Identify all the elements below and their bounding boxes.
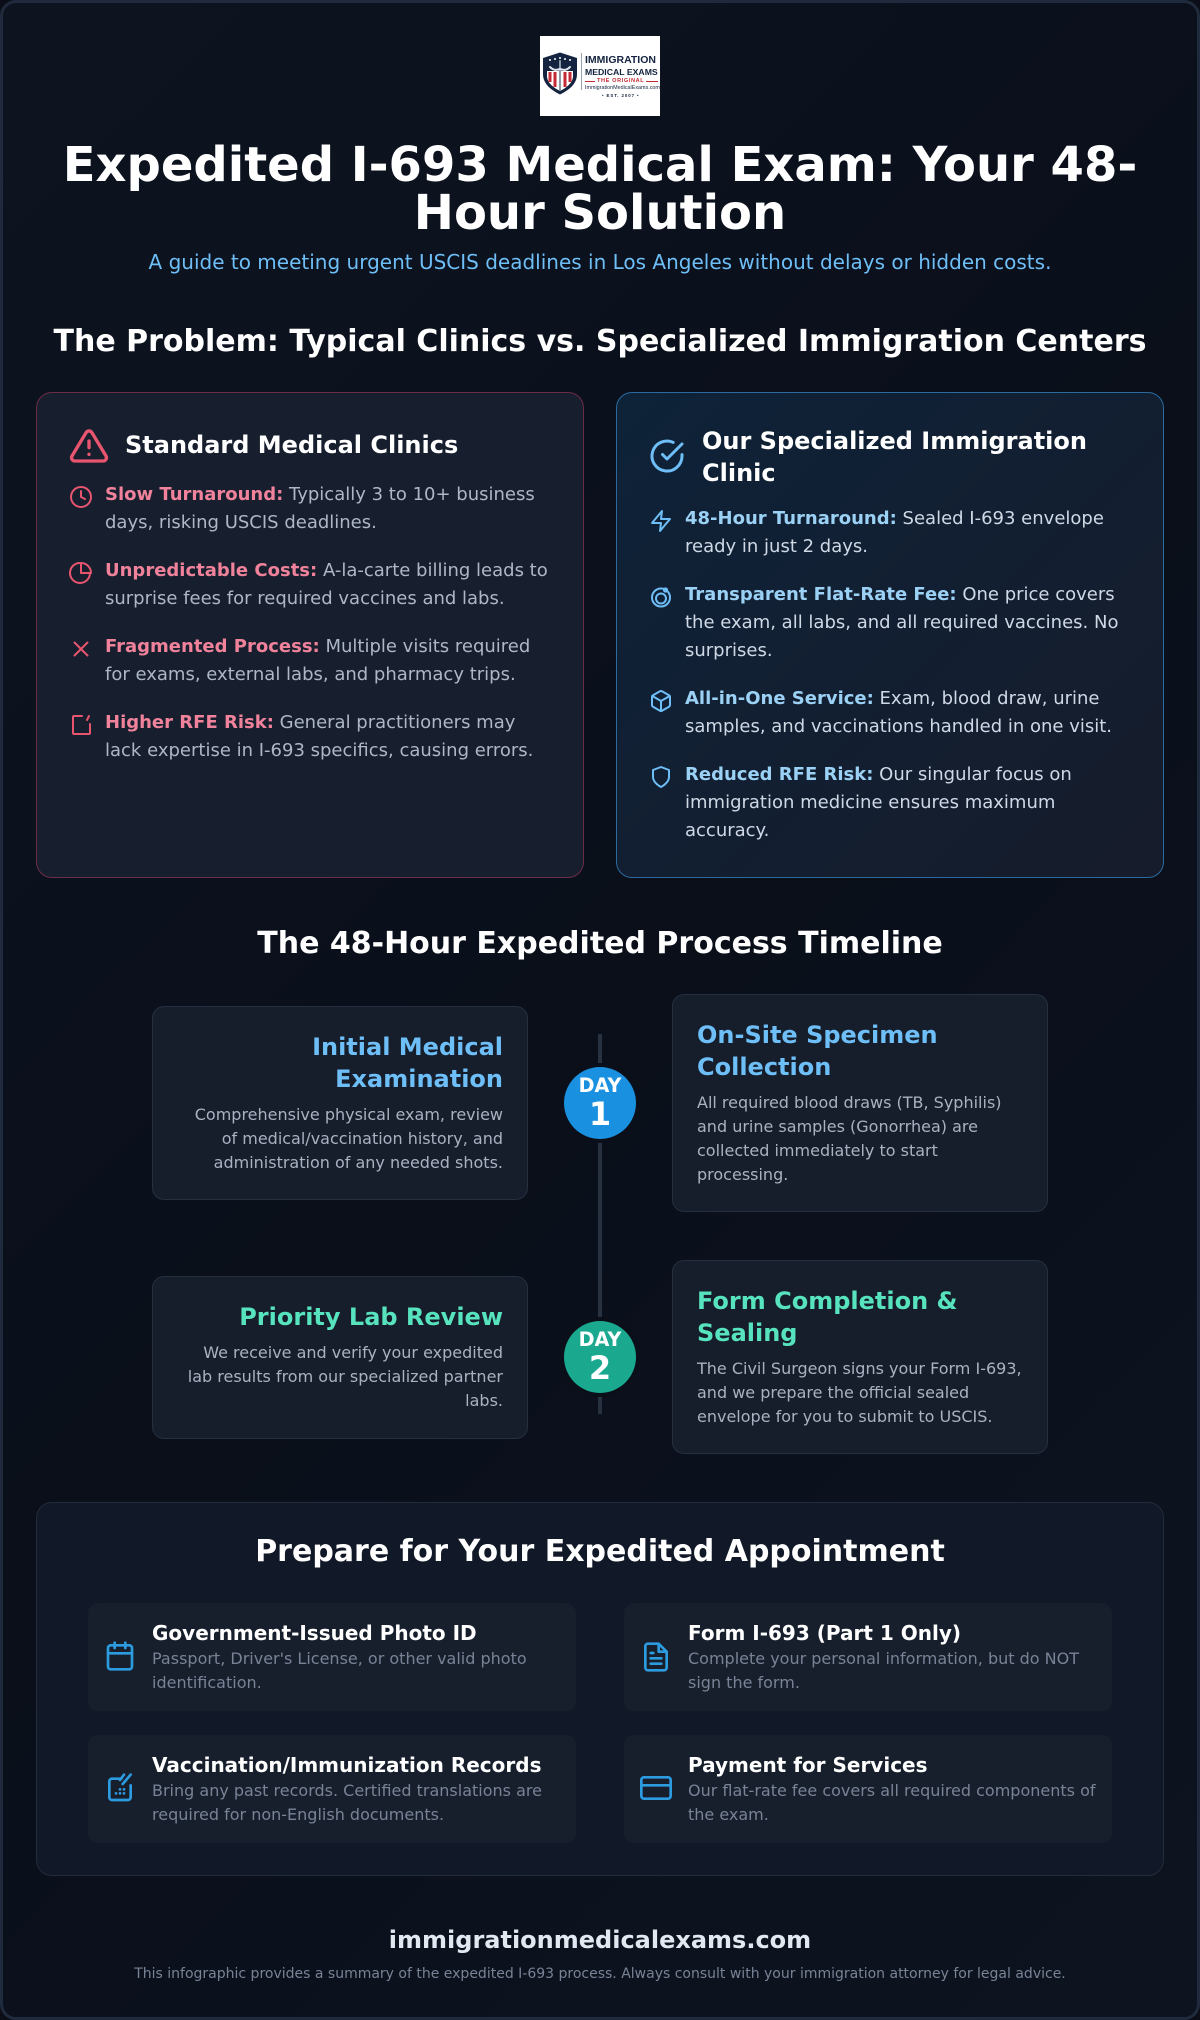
marker: day 2: 2 [589, 1349, 611, 1387]
item text: identification. [152, 1673, 262, 1692]
item text: Higher RFE Risk: General practitioners may [105, 712, 515, 733]
item: 48-hour turnaround [651, 508, 1104, 557]
panel: prepare for appointment [36, 1502, 1164, 1876]
logo text: IMMIGRATION [585, 54, 656, 66]
icon: records [104, 1772, 136, 1804]
item: payment [624, 1735, 1112, 1843]
marker: day 1: 1 [589, 1095, 611, 1133]
step title: Form Completion & [697, 1287, 957, 1315]
step text [696, 1359, 1022, 1426]
icon: check circle [650, 440, 684, 472]
step title: Examination [335, 1065, 503, 1093]
icon: form check [72, 715, 91, 735]
item text [105, 636, 530, 685]
heading: timeline: The 48-Hour Expedited Process Timeline [257, 926, 943, 961]
step text: of medical/vaccination history, and [222, 1129, 503, 1148]
step title [697, 1021, 938, 1081]
item: vaccination records [88, 1735, 576, 1843]
step text [188, 1343, 503, 1410]
title: Expedited I-693 Medical Exam: Your 48- [63, 137, 1137, 193]
logo text: • EST. 2007 • [602, 93, 639, 98]
panel: specialized immigration clinic [616, 392, 1164, 878]
item text: accuracy. [685, 820, 769, 841]
item text: Reduced RFE Risk: Our singular focus on [685, 764, 1072, 785]
marker: day 2: DAY [579, 1328, 621, 1351]
subtitle: A guide to meeting urgent USCIS deadlines in Los Angeles without delays or hidden costs. [149, 250, 1051, 274]
item text [105, 560, 548, 609]
item text [105, 484, 535, 533]
heading: the problem: The Problem: Typical Clinics vs. Specialized Immigration Centers [54, 324, 1146, 359]
item text [688, 1647, 1079, 1695]
step title: Initial Medical [312, 1033, 503, 1061]
footer disclaimer: This infographic provides a summary of the expedited I-693 process. Always consult with your immigration attorney for legal advice. [134, 1966, 1066, 1982]
item text: Our flat-rate fee covers all required components of [688, 1781, 1095, 1800]
footer url: immigrationmedicalexams.com [389, 1926, 811, 1954]
marker: day 1 [564, 1067, 636, 1139]
item text: surprises. [685, 640, 773, 661]
item: photo id [88, 1603, 576, 1711]
step text: administration of any needed shots. [214, 1153, 503, 1172]
icon: document [644, 1642, 668, 1672]
step title: Collection [697, 1053, 831, 1081]
logo divider [581, 53, 582, 90]
icon: lightning [651, 510, 671, 532]
item text [152, 1649, 527, 1692]
item text: sign the form. [688, 1673, 800, 1692]
step text: and urine samples (Gonorrhea) are [697, 1117, 978, 1136]
marker: day 2 [564, 1321, 636, 1393]
item text: 48-Hour Turnaround: Sealed I-693 envelope [685, 508, 1104, 529]
step title [697, 1287, 957, 1347]
item text: Complete your personal information, but do NOT [688, 1649, 1079, 1668]
panel heading: Standard Medical Clinics [125, 431, 458, 459]
item title: Form I-693 (Part 1 Only) [688, 1621, 961, 1645]
step text: The Civil Surgeon signs your Form I-693, [697, 1359, 1022, 1378]
panel heading: Clinic [702, 459, 776, 487]
step text: collected immediately to start [697, 1141, 938, 1160]
item text: days, risking USCIS deadlines. [105, 512, 377, 533]
step: initial medical examination [152, 1006, 528, 1200]
step title: Sealing [697, 1319, 797, 1347]
item text: samples, and vaccinations handled in one visit. [685, 716, 1112, 737]
item: slow turnaround [70, 484, 535, 533]
panel: standard medical clinics [36, 392, 584, 878]
icon: warning triangle [70, 429, 108, 463]
item: all-in-one service [651, 688, 1112, 737]
step text: and we prepare the official sealed [697, 1383, 969, 1402]
title [63, 137, 1137, 241]
item: reduced RFE risk [652, 764, 1072, 841]
marker: day 1: DAY [579, 1074, 621, 1097]
step text: We receive and verify your expedited [203, 1343, 503, 1362]
step title: On-Site Specimen [697, 1021, 938, 1049]
item: form i-693 [624, 1603, 1112, 1711]
icon: credit card [640, 1772, 672, 1804]
panel heading [702, 427, 1087, 487]
item text [685, 584, 1118, 661]
item text: ready in just 2 days. [685, 536, 868, 557]
item: fragmented process [74, 636, 530, 685]
step text: Comprehensive physical exam, review [195, 1105, 503, 1124]
icon: pie chart [69, 562, 92, 584]
item text: for exams, external labs, and pharmacy trips. [105, 664, 516, 685]
step title [312, 1033, 503, 1093]
step text: envelope for you to submit to USCIS. [697, 1407, 993, 1426]
item: unpredictable costs [69, 560, 548, 609]
step: on-site specimen collection [672, 994, 1048, 1212]
item text [685, 688, 1112, 737]
step text [697, 1093, 1002, 1184]
step text: processing. [697, 1165, 788, 1184]
item: higher RFE risk [72, 712, 533, 761]
item text: immigration medicine ensures maximum [685, 792, 1055, 813]
panel heading: Our Specialized Immigration [702, 427, 1087, 455]
item text [685, 764, 1072, 841]
timeline line [598, 1034, 602, 1414]
icon: calendar [106, 1641, 134, 1671]
item: flat-rate fee [651, 584, 1118, 661]
step title: Priority Lab Review [239, 1303, 503, 1331]
item text: the exam. [688, 1805, 769, 1824]
item text: Unpredictable Costs: A-la-carte billing leads to [105, 560, 548, 581]
logo [540, 36, 660, 116]
item title: Payment for Services [688, 1753, 928, 1777]
item text: Transparent Flat-Rate Fee: One price covers [685, 584, 1115, 605]
item title: Vaccination/Immunization Records [152, 1753, 541, 1777]
icon: shield [652, 766, 670, 788]
step text: labs. [465, 1391, 503, 1410]
step: form completion and sealing [672, 1260, 1048, 1454]
step text: lab results from our specialized partner [188, 1367, 503, 1386]
item text [105, 712, 533, 761]
item text: Bring any past records. Certified translations are [152, 1781, 542, 1800]
logo text [585, 54, 660, 98]
item text: All-in-One Service: Exam, blood draw, urine [685, 688, 1100, 709]
panel heading: Prepare for Your Expedited Appointment [255, 1534, 945, 1569]
icon: coin spiral [651, 587, 671, 608]
logo text: ImmigrationMedicalExams.com [585, 85, 660, 91]
item text: Slow Turnaround: Typically 3 to 10+ business [105, 484, 535, 505]
item text: Fragmented Process: Multiple visits required [105, 636, 530, 657]
item title: Government-Issued Photo ID [152, 1621, 477, 1645]
icon: x mark [74, 642, 88, 656]
logo text: MEDICAL EXAMS [585, 67, 658, 77]
item text [685, 508, 1104, 557]
item text: required for non-English documents. [152, 1805, 444, 1824]
item text: lack expertise in I-693 specifics, causing errors. [105, 740, 533, 761]
item text [688, 1779, 1095, 1827]
logo shield [543, 52, 577, 94]
step text [195, 1105, 503, 1172]
icon: cube [651, 690, 671, 712]
step: priority lab review [152, 1276, 528, 1439]
item text: Passport, Driver's License, or other valid photo [152, 1649, 527, 1668]
item text: the exam, all labs, and all required vaccines. No [685, 612, 1118, 633]
logo text: THE ORIGINAL [597, 78, 644, 84]
item text [152, 1779, 542, 1827]
item text: surprise fees for required vaccines and labs. [105, 588, 505, 609]
icon: clock [70, 486, 92, 508]
title: Hour Solution [414, 185, 786, 241]
step text: All required blood draws (TB, Syphilis) [697, 1093, 1002, 1112]
